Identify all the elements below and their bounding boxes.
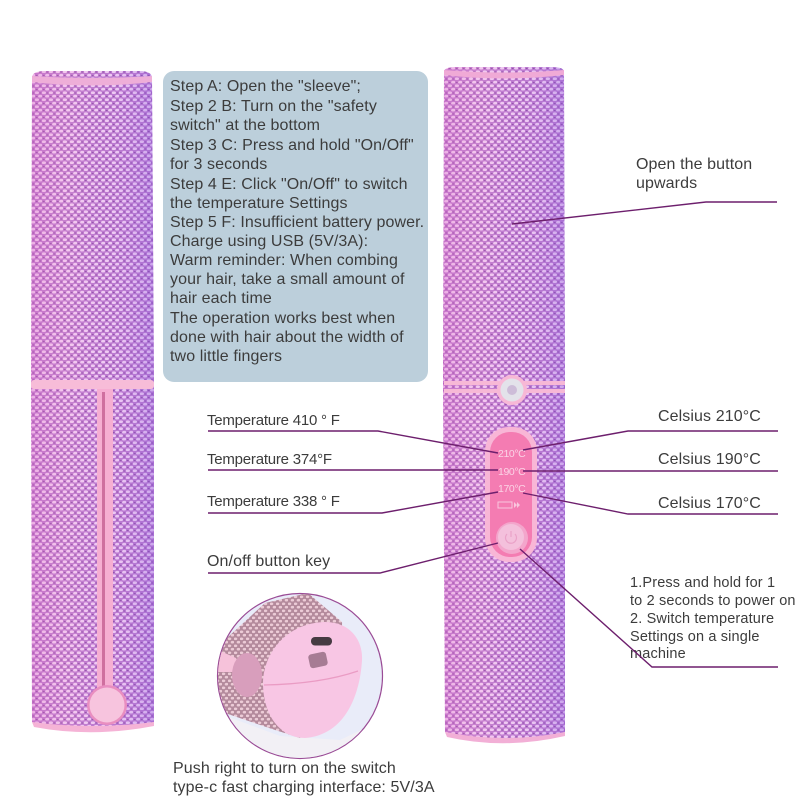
callout: celsius 170: Celsius 170°C (658, 495, 761, 512)
inset: charging port closeup (215, 593, 382, 760)
bottom band (445, 732, 565, 743)
callout: on/off key (207, 543, 498, 573)
instruction text: the temperature Settings (170, 195, 348, 212)
callout: celsius 190: Celsius 190°C (658, 451, 761, 468)
instruction text: Step A: Open the "sleeve"; (170, 78, 361, 95)
temperature readouts: 170°C (498, 483, 526, 495)
bottom band (32, 722, 154, 732)
callout: open the button (512, 156, 777, 224)
instruction text: done with hair about the width of (170, 329, 404, 346)
hinge button (87, 685, 127, 725)
instruction text: Charge using USB (5V/3A): (170, 233, 368, 250)
battery icon (498, 502, 520, 508)
instruction text: Step 5 F: Insufficient battery power. (170, 214, 424, 231)
instruction text: for 3 seconds (170, 156, 267, 173)
callout: power instructions: to 2 seconds to power on (630, 593, 796, 609)
callout: power instructions: 1.Press and hold for 1 (630, 575, 775, 591)
device: closed sleeve, left view (31, 71, 154, 732)
temperature readouts: 190°C (498, 466, 526, 478)
hinge (232, 653, 262, 697)
top cap (444, 70, 564, 78)
collar with gem (444, 375, 565, 405)
instruction text: switch" at the bottom (170, 117, 320, 134)
callout: temperature 410 F: Temperature 410 ° F (207, 412, 340, 429)
callout: power instructions: 2. Switch temperature (630, 611, 774, 627)
control panel (485, 427, 537, 562)
vertical slot (97, 389, 113, 707)
callout: power instructions: machine (630, 646, 686, 662)
inset caption: Push right to turn on the switch (173, 760, 396, 777)
callout: temperature 338 F: Temperature 338 ° F (207, 493, 340, 510)
inset caption: type-c fast charging interface: 5V/3A (173, 779, 435, 796)
callout: on/off key: On/off button key (207, 553, 330, 570)
instruction text: Warm reminder: When combing (170, 252, 398, 269)
callout: celsius 210 (523, 408, 778, 450)
top cap (32, 76, 152, 86)
safety switch (308, 651, 328, 669)
usb port (311, 637, 332, 646)
instruction panel (163, 71, 429, 382)
instruction text: Step 3 C: Press and hold "On/Off" (170, 137, 414, 154)
callout: power instructions (520, 549, 800, 667)
callout: temperature 338 F (207, 492, 498, 513)
callout: open the button: upwards (636, 175, 697, 192)
callout: celsius 170 (523, 493, 778, 514)
instruction text: hair each time (170, 290, 272, 307)
instruction text: your hair, take a small amount of (170, 271, 405, 288)
device: front view with control panel (443, 67, 565, 743)
instruction text: The operation works best when (170, 310, 395, 327)
callout: temperature 410 F (207, 412, 498, 453)
callout: celsius 210: Celsius 210°C (658, 408, 761, 425)
callout: open the button: Open the button (636, 156, 752, 173)
instruction text: two little fingers (170, 348, 282, 365)
instruction text: Step 4 E: Click "On/Off" to switch (170, 176, 408, 193)
power button (496, 522, 528, 554)
end cap (263, 622, 362, 738)
temperature readouts: 210°C (498, 448, 526, 460)
callout: temperature 374 F: Temperature 374°F (207, 451, 332, 468)
slot opening (218, 650, 236, 672)
callout: power instructions: Settings on a single (630, 629, 760, 645)
collar band (31, 380, 154, 389)
instruction text: Step 2 B: Turn on the "safety (170, 98, 377, 115)
